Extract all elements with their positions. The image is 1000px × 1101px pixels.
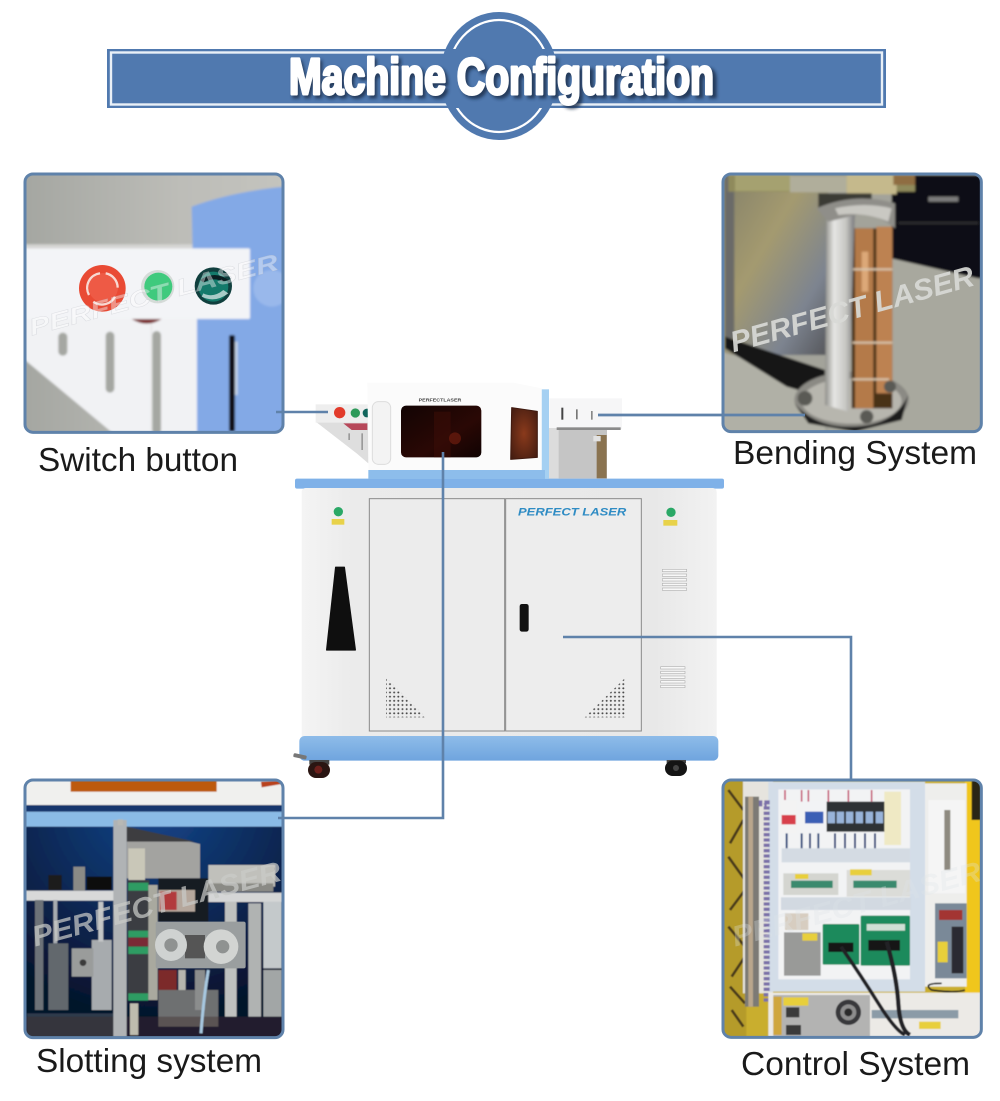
castor right xyxy=(665,760,687,776)
leader line: slotting system xyxy=(278,452,443,818)
brand logo: PERFECT LASER xyxy=(518,506,626,518)
castor left xyxy=(308,760,330,778)
watermark: PERFECT LASER xyxy=(26,249,281,340)
upper vent xyxy=(662,569,687,590)
watermark: PERFECT LASER xyxy=(729,856,985,953)
right door xyxy=(506,499,641,731)
right bending unit xyxy=(549,398,622,479)
castor brake xyxy=(293,753,307,760)
title banner xyxy=(107,12,886,140)
label: switch button: Switch button xyxy=(38,441,238,478)
watermark: PERFECT LASER xyxy=(726,260,978,359)
leader line: switch button xyxy=(276,411,328,413)
title: Machine Configuration xyxy=(289,48,714,105)
cabinet base xyxy=(299,736,718,761)
panel: control system xyxy=(722,777,988,1043)
label: bending system: Bending System xyxy=(733,434,977,471)
housing brand: PERFECTLASER xyxy=(419,397,462,402)
perforation left xyxy=(386,677,426,717)
icon: emergency stop button xyxy=(79,265,126,312)
watermark: PERFECT LASER xyxy=(29,856,285,953)
door lock xyxy=(520,604,529,632)
lower vent xyxy=(661,667,685,688)
pulley plate xyxy=(155,922,246,968)
label: control system: Control System xyxy=(741,1045,970,1082)
side handle xyxy=(327,567,355,650)
panel: slotting system xyxy=(22,777,288,1043)
leader line: bending system xyxy=(598,414,805,416)
left control panel arm xyxy=(316,404,371,463)
indicator right xyxy=(663,508,677,526)
perforation right xyxy=(585,678,625,717)
icon: dark green button xyxy=(195,267,232,305)
side window xyxy=(511,408,537,459)
laser housing xyxy=(367,383,549,479)
machine illustration xyxy=(293,383,724,778)
panel: switch button xyxy=(22,172,290,438)
table top xyxy=(295,479,724,489)
cabinet body xyxy=(302,488,717,741)
indicator left xyxy=(332,507,344,525)
leader line: control system xyxy=(563,637,851,781)
front window xyxy=(401,406,481,457)
icon: green button xyxy=(141,270,174,303)
left door xyxy=(369,499,505,731)
title banner: Machine Configuration xyxy=(291,51,718,108)
label: slotting system: Slotting system xyxy=(36,1042,262,1079)
panel: bending system xyxy=(722,172,988,438)
